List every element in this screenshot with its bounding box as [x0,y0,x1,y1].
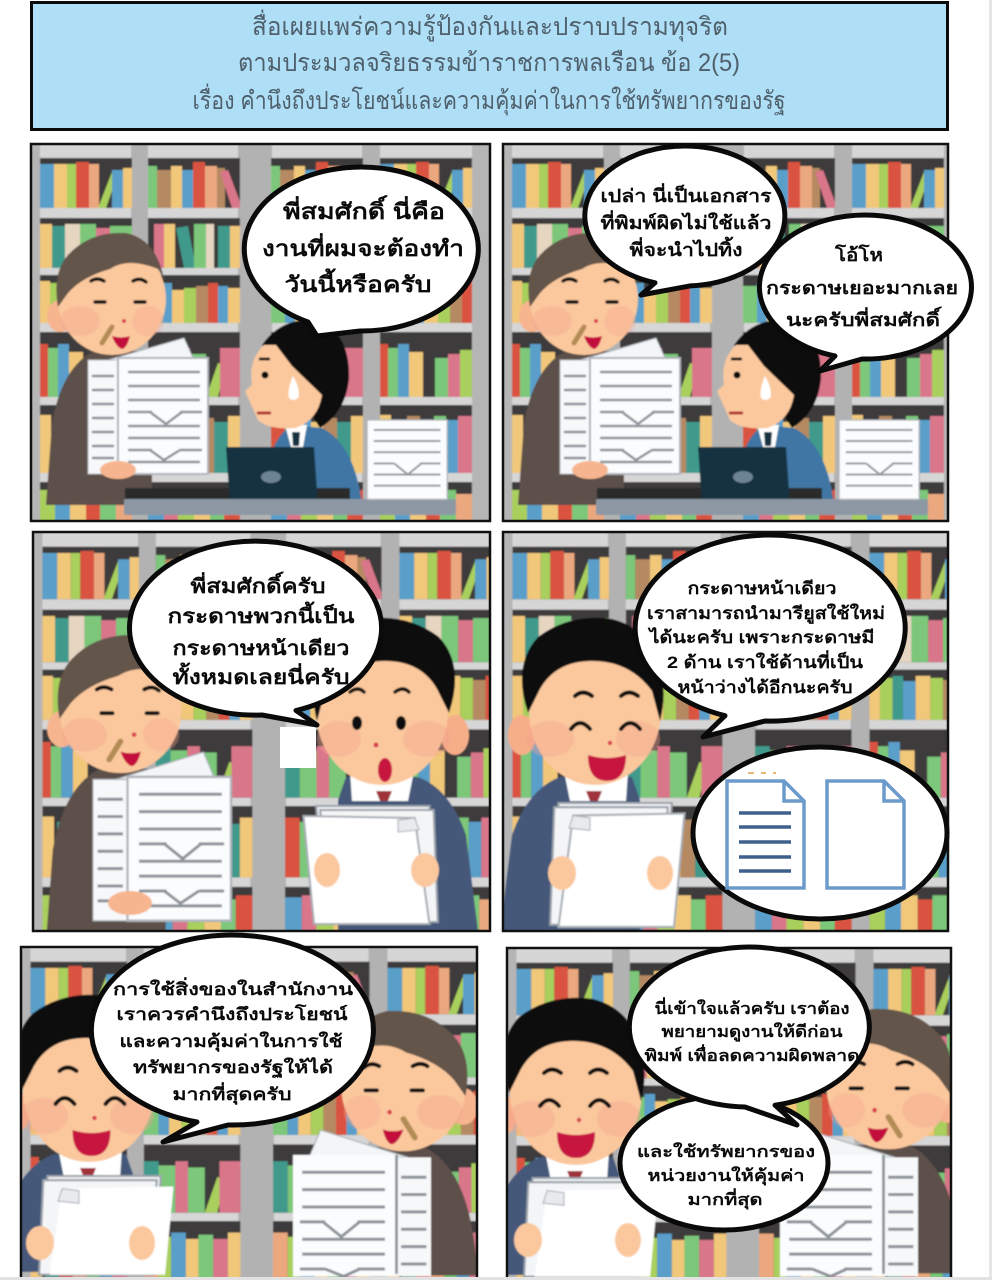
bubble: two paper sides [693,747,947,919]
speech bubble 6a [629,947,869,1125]
speech bubble 5: เราควรคำนึงถึงประโยชน์ [116,1004,348,1024]
speech bubble 3 [130,541,382,725]
speech bubble 5 [91,935,373,1142]
panel 1 [31,144,491,544]
panel 3 illustration [34,533,489,930]
white patch [280,727,316,768]
speech bubble 3: ทั้งหมดเลยนี่ครับ [172,662,350,689]
speech bubble 1: พี่สมศักดิ์ นี่คือ [283,195,445,224]
speech bubble 5: และความคุ้มค่าในการใช้ [120,1031,343,1052]
speech bubble 3: กระดาษหน้าเดียว [172,637,350,660]
speech bubble 6a: นี่เข้าใจแล้วครับ เราต้อง [654,997,850,1018]
panel 2 illustration [504,145,947,520]
title line 3: เรื่อง คำนึงถึงประโยชน์และความคุ้มค่าในการใช้ทรัพยากรของรัฐ [192,83,786,116]
panel 6 frame [507,948,951,1278]
speech bubble 2a: พี่จะนำไปทิ้ง [630,236,742,260]
speech bubble 3: พี่สมศักดิ์ครับ [190,571,326,598]
speech bubble 4: กระดาษหน้าเดียว [688,578,836,598]
speech bubble 6b: หน่วยงานให้คุ้มค่า [648,1166,804,1186]
panel 4 [500,532,986,952]
speech bubble 2a: ที่พิมพ์ผิดไม่ใช้แล้ว [600,210,772,233]
title banner [32,2,948,130]
speech bubble 2b: กระดาษเยอะมากเลย [766,278,958,298]
panel 4 illustration [504,533,947,930]
speech bubble 2a [585,146,785,295]
panel 2 [503,144,971,544]
speech bubble 4 [635,535,905,737]
panel 3 [33,532,516,952]
panel 5 [0,935,504,1280]
panel 6 [481,947,990,1280]
speech bubble 6b [620,1096,828,1230]
speech bubble 1: งานที่ผมจะต้องทำ [262,232,464,261]
icon: printed page [727,781,804,888]
speech bubble 5: มากที่สุดครับ [172,1082,292,1105]
speech bubble 4: หน้าว่างได้อีกนะครับ [678,677,852,697]
speech bubble 2b: โอ้โห [834,244,883,265]
panel 5 frame [21,947,477,1278]
speech bubble 6a: พยายามดูงานให้ดีก่อน [662,1022,843,1043]
speech bubble 4: 2 ด้าน เราใช้ด้านที่เป็น [667,650,863,672]
title line 2: ตามประมวลจริยธรรมข้าราชการพลเรือน ข้อ 2(5) [238,49,740,77]
panel 6 illustration [508,949,950,1277]
speech bubble 4: เราสามารถนำมารียูสใช้ใหม่ [647,603,885,625]
panel 5 illustration [22,948,476,1277]
icon: blank page [827,781,904,888]
speech bubble 2b: นะครับพี่สมศักดิ์ [786,306,943,330]
speech bubble 1: วันนี้หรือครับ [284,268,432,297]
speech bubble 2b [759,215,971,371]
speech bubble 3: กระดาษพวกนี้เป็น [168,601,355,628]
speech bubble 5: ทรัพยากรของรัฐให้ได้ [133,1057,333,1079]
speech bubble 1 [244,167,478,336]
title line 1: สื่อเผยแพร่ความรู้ป้องกันและปราบปรามทุจริต [252,9,728,42]
speech bubble 2a: เปล่า นี่เป็นเอกสาร [600,183,772,206]
panel 1 illustration [32,145,489,520]
speech bubble 4: ได้นะครับ เพราะกระดาษมี [647,627,874,647]
speech bubble 6b: และใช้ทรัพยากรของ [637,1142,815,1161]
speech bubble 6a: พิมพ์ เพื่อลดความผิดพลาด [644,1044,860,1065]
speech bubble 6b: มากที่สุด [688,1188,762,1210]
speech bubble 5: การใช้สิ่งของในสำนักงาน [113,977,353,999]
